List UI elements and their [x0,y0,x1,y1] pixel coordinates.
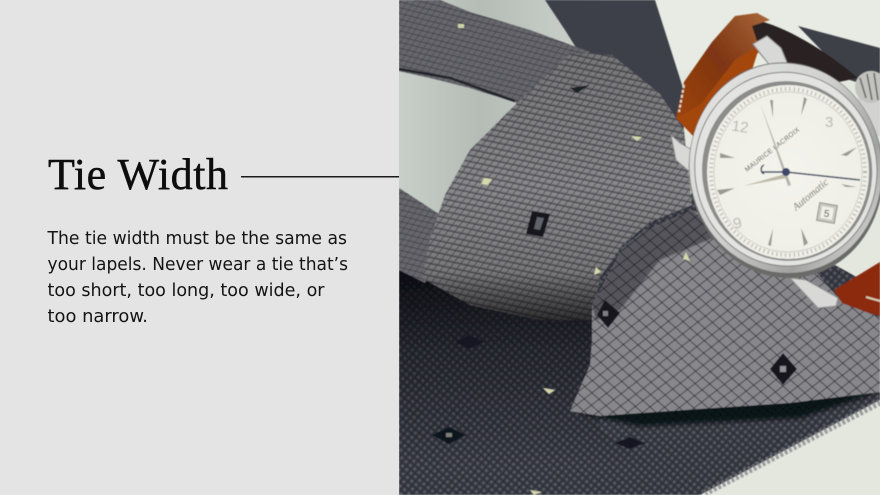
brand text: MAURICE LACROIX [744,126,802,174]
watch dial [707,85,869,259]
watch strap [676,13,880,316]
body text: too narrow. [48,307,148,327]
title: Tie Width [48,150,228,199]
date window: 5 [823,209,831,220]
front blade square mark [770,353,797,385]
panel: left text panel [0,0,399,495]
dot [458,24,464,28]
dial numerals: 3 [825,114,833,131]
date window [817,203,837,223]
lower blade pattern marks [432,427,466,444]
title rule [241,176,399,178]
dial indices [717,97,857,246]
knot square mark [526,211,550,237]
body text: too short, too long, too wide, or [48,281,325,301]
tie: rear dark fold [545,0,684,140]
body text: your lapels. Never wear a tie that’s [48,255,348,275]
dial numerals: 12 [731,118,750,137]
watch dial: Automatic [790,177,831,214]
watch case [688,62,880,278]
tie: lower blade [399,190,880,495]
dial numerals [731,114,833,233]
watch crown [855,71,880,136]
photo background [399,0,588,240]
tie: upper band [399,0,590,103]
watch hands [743,103,860,186]
tie: left fold [399,188,439,284]
dial numerals: 9 [731,214,744,233]
watch lugs [671,36,838,308]
body text: The tie width must be the same as [47,229,347,249]
tie: front blade [570,210,880,416]
tie: knot [422,53,692,320]
body text [47,229,348,327]
photo: tie and wristwatch [399,0,880,495]
